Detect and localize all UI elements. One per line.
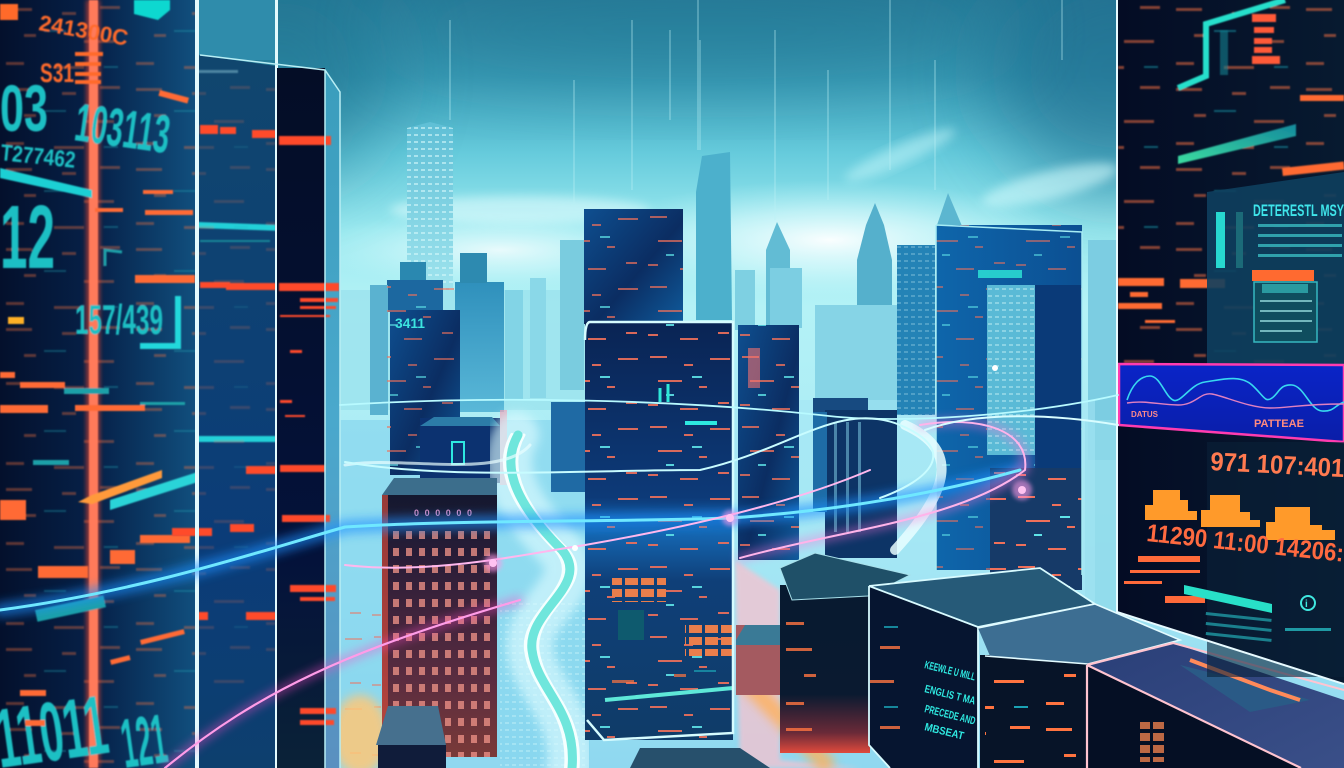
chart: blue line screen: DATUS [1131, 410, 1159, 419]
screen text: orange codes: 241300C [37, 10, 130, 51]
light glow on ground [332, 560, 862, 768]
right data panel [1117, 0, 1344, 684]
screen text: teal numbers [0, 71, 174, 768]
foreground rooftop blocks [780, 553, 1344, 768]
screen text: orange codes: S31 [40, 58, 74, 88]
chart: blue line screen: PATTEAE [1254, 418, 1304, 430]
tower: centre left [370, 253, 504, 475]
river of light roads [345, 425, 942, 768]
small foreground block [736, 625, 780, 695]
screen text: teal numbers: 157/439 [75, 296, 163, 343]
chart: blue line screen [1119, 364, 1344, 442]
icon: info badge [1285, 596, 1331, 631]
tower: centre left: 3411 [395, 315, 425, 331]
distant skyline [340, 122, 1120, 768]
left glass panel [172, 0, 278, 768]
bars: orange tile staircase [1145, 490, 1335, 540]
screen text: teal numbers: T277462 [0, 139, 77, 173]
block: teal text tower [869, 568, 1095, 768]
screen text: teal numbers: 03 [0, 71, 48, 145]
tower: right of centre [738, 325, 799, 560]
screen: data readout [1207, 172, 1344, 365]
tower: brick building [382, 478, 497, 757]
tower: large glass right [936, 225, 1082, 590]
tower: mid right dark [813, 398, 897, 558]
screen text: orange codes [0, 4, 130, 88]
tower: small left of centre [420, 402, 585, 492]
screen: orange numbers and bars [1124, 442, 1344, 677]
tower: upper centre [584, 209, 683, 324]
block: mid roof [978, 604, 1180, 768]
block: front right roof [1087, 643, 1344, 768]
orange and cyan dashes [0, 90, 195, 726]
block: teal text tower: KEEWLE U MILL [923, 659, 977, 684]
tower: brick building: 000000 [414, 508, 472, 518]
icon: info badge: i [1305, 599, 1308, 610]
screen text: teal numbers: 12 [0, 188, 55, 288]
left data panel [0, 0, 204, 768]
tower: far right cluster [897, 245, 935, 415]
block: dark tower with red glow [780, 553, 910, 753]
block: teal text tower: PRECEDE AND [923, 703, 977, 727]
block: teal text tower: ENGLIS T MA [923, 683, 977, 708]
left dark tower [200, 55, 340, 768]
block: teal text tower: MBSEAT [923, 721, 965, 743]
screen text: teal numbers: 103113 [71, 92, 174, 165]
small rooftop bottom [376, 706, 770, 768]
tower: central data building [585, 322, 733, 740]
neon data streams [0, 365, 1118, 768]
